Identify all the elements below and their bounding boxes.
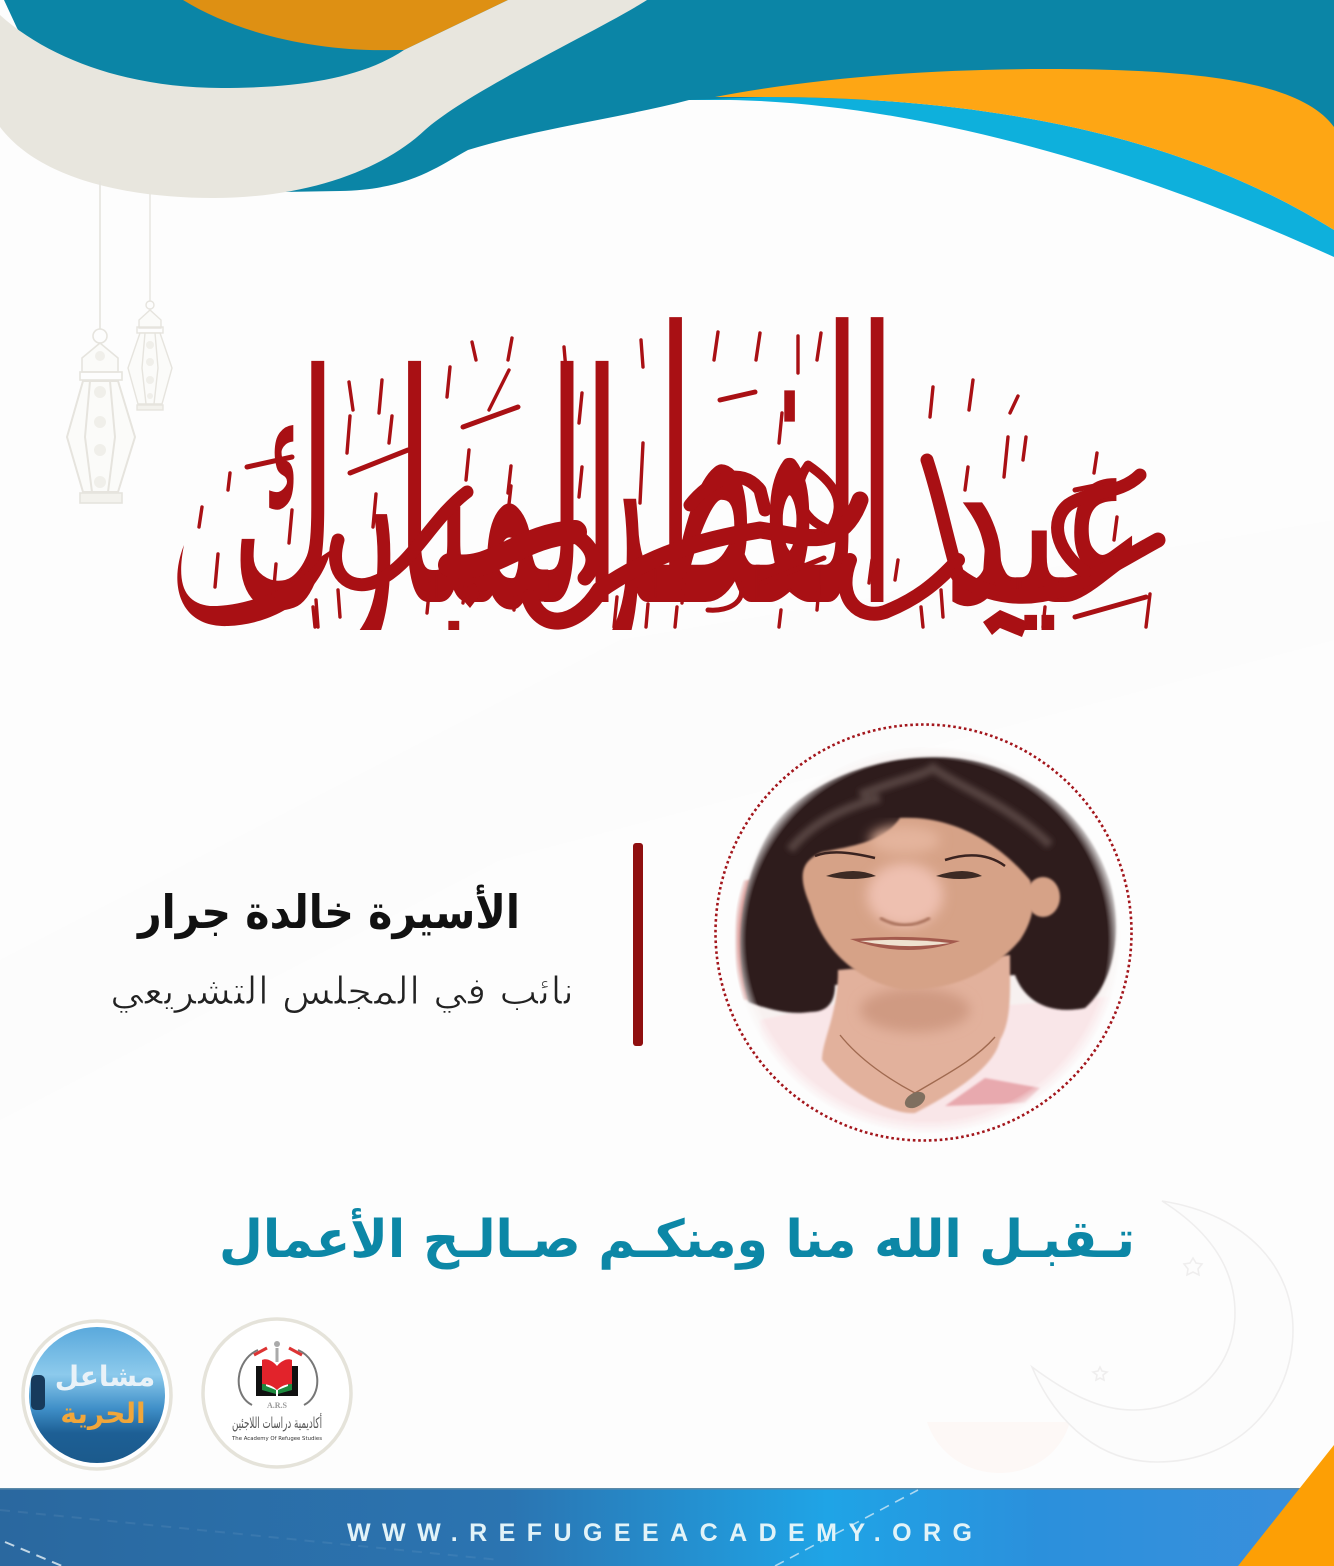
logo: Mashaal al-Hurriya: الحرية: [60, 1397, 146, 1430]
icon: small hanging lantern: [128, 194, 172, 410]
title words: [240, 317, 1132, 630]
word: mubarak: المبارك: [232, 312, 620, 676]
wave: teal: [4, 0, 1334, 192]
word: eid: عيد: [945, 386, 1145, 655]
ornamental ticks: [199, 332, 1150, 627]
word: fitr: الفطر: [580, 256, 894, 692]
wave: orange: [715, 69, 1334, 230]
flourishes: [177, 460, 1158, 626]
wave: light blue: [689, 97, 1334, 257]
title calligraphy: Eid al-Fitr al-Mubarak: [177, 317, 1166, 637]
photo: shirt: [762, 998, 1101, 1124]
logo: Mashaal al-Hurriya: [23, 1321, 171, 1469]
logo: Academy of Refugee Studies: [203, 1319, 351, 1467]
footer bar: [0, 1445, 1334, 1566]
logo initials: A.R.S: [267, 1401, 288, 1410]
photo: necklace: [840, 1035, 995, 1093]
background pattern: [0, 520, 1334, 1120]
vertical divider bar: [633, 843, 643, 1046]
footer orange corner: [1238, 1445, 1334, 1566]
wave: dark orange: [183, 0, 508, 50]
logo book: [256, 1366, 298, 1396]
photo: face: [803, 818, 1033, 990]
photo: [730, 745, 1130, 1140]
photo: hair: [740, 757, 1116, 1013]
subtitle: member of the legislative council: نائب في المجلس التشريعي: [110, 969, 574, 1014]
faint blush shape: [927, 1422, 1070, 1473]
logo english name: The Academy Of Refugee Studies: [231, 1436, 322, 1442]
icon: crescent and stars: [927, 1201, 1293, 1473]
photo: red backdrop: [734, 879, 750, 1001]
logo: Mashaal al-Hurriya: مشاعل: [55, 1360, 155, 1393]
name: Khalida Jarrar: الأسيرة خالدة جرار: [136, 884, 520, 939]
photo: mouth: [850, 937, 960, 950]
photo: ear: [1026, 877, 1060, 917]
ornamental swashes: [247, 392, 1146, 617]
dotted ring: [716, 724, 1132, 1140]
logo arc: [239, 1350, 317, 1405]
portrait: photo in dotted ring: [716, 724, 1132, 1140]
footer url: WWW.REFUGEEACADEMY.ORG: [347, 1519, 972, 1547]
icon: large hanging lantern: [67, 181, 135, 503]
wave: beige: [0, 0, 647, 198]
photo: eyes and brows: [815, 852, 1005, 866]
photo: neck and chest: [822, 955, 1010, 1113]
ornamental dots: [457, 583, 1028, 637]
top wave banner: [0, 0, 1334, 257]
tagline: تـقبـل الله منا ومنكـم صـالـح الأعمال: [219, 1207, 1135, 1270]
logo arabic name: أكاديمية دراسات اللاجئين: [232, 1413, 322, 1432]
